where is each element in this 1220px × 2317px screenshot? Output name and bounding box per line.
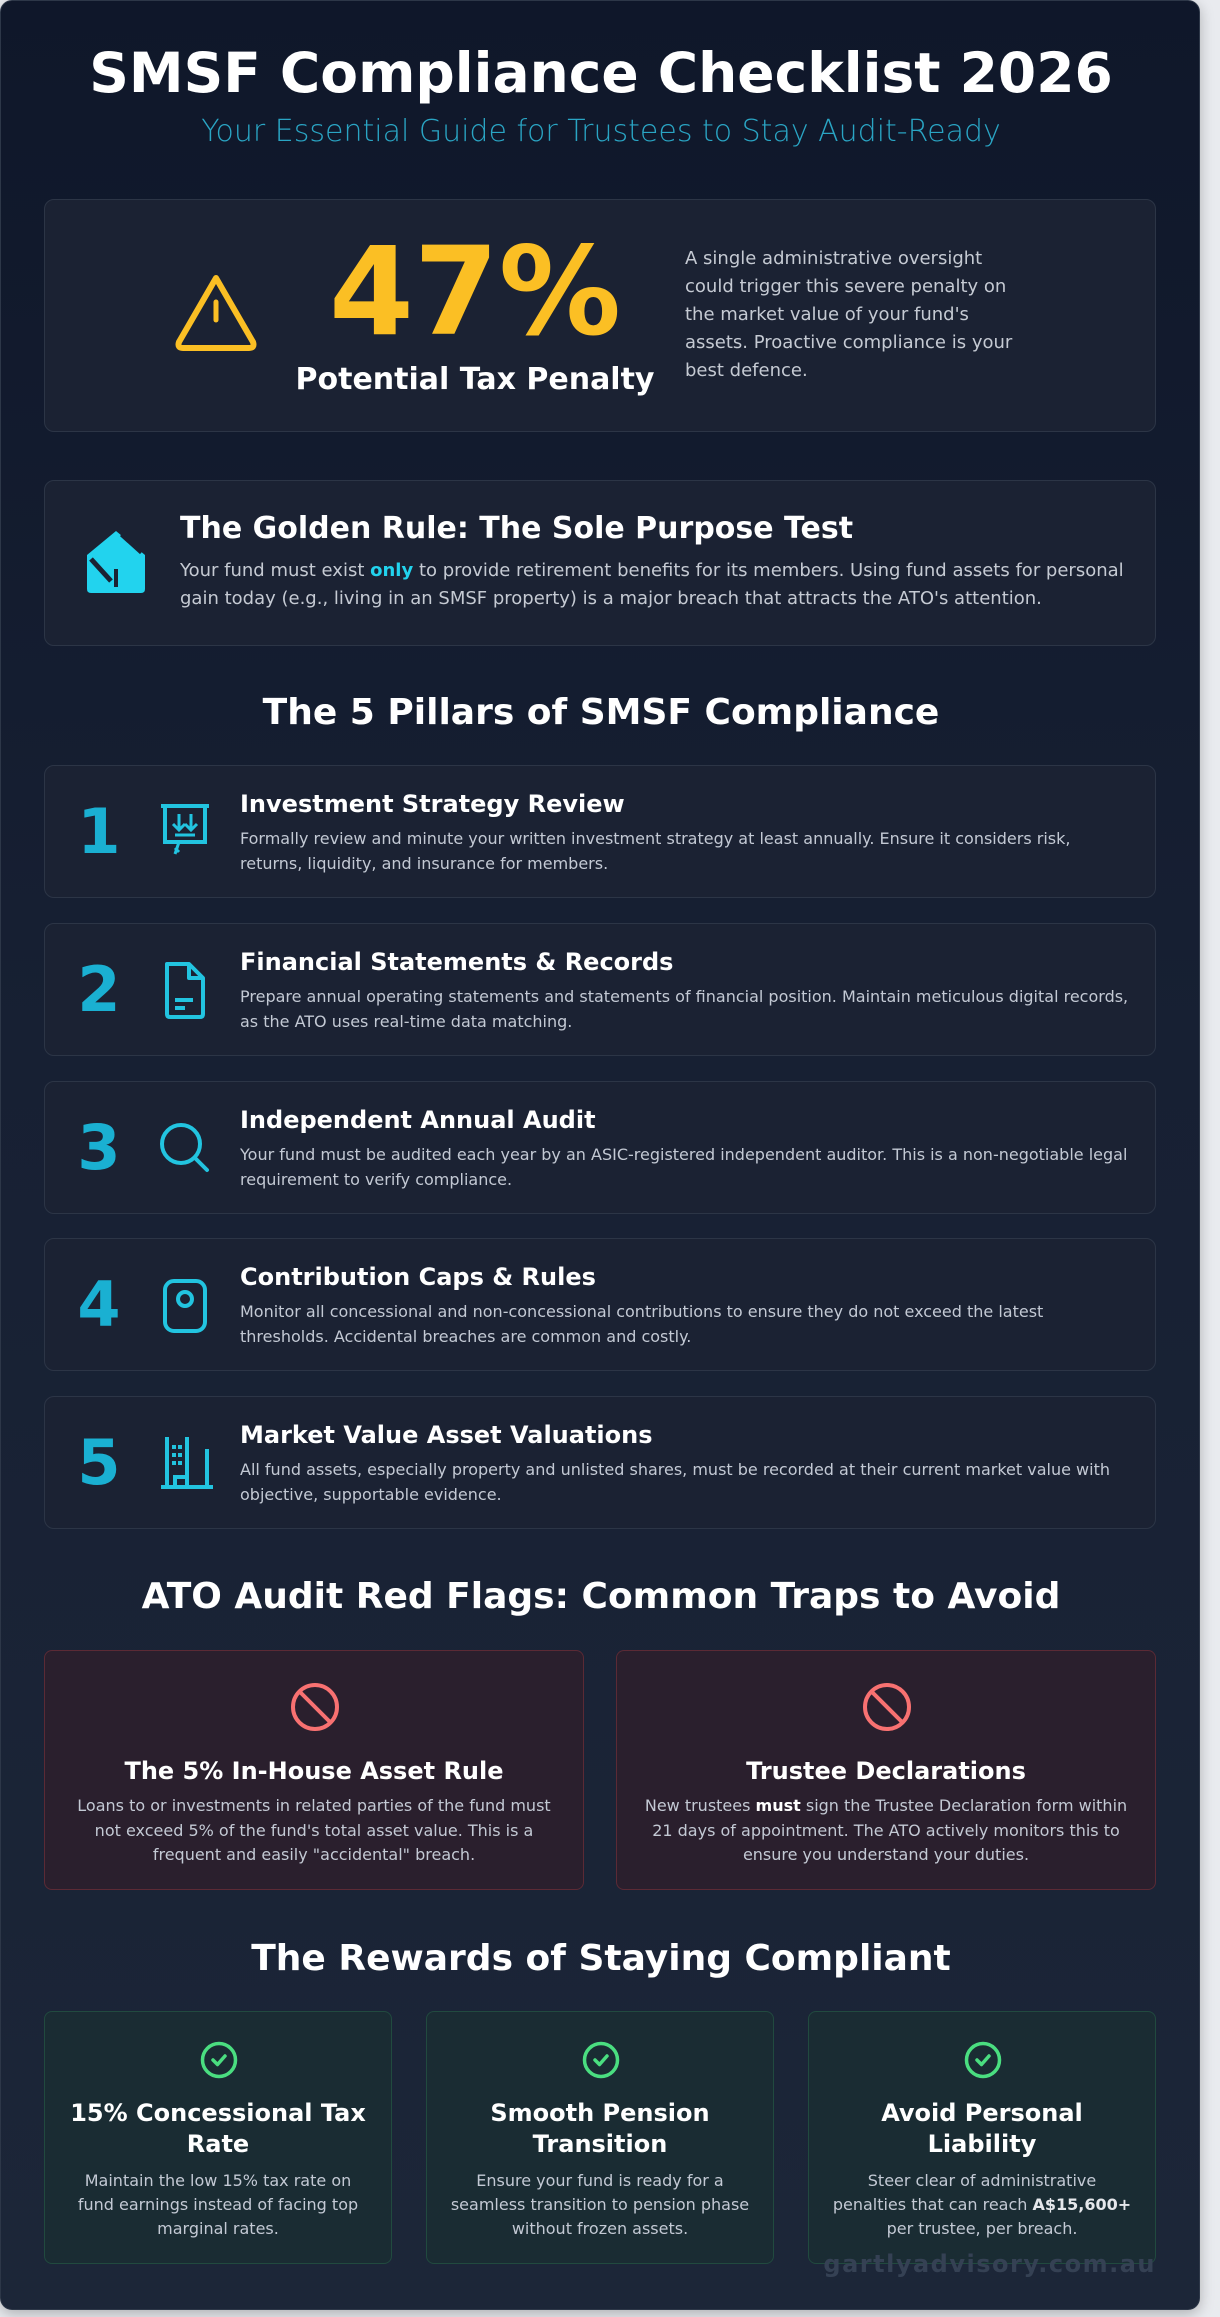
red flag card 2 — [616, 1650, 1156, 1890]
text: Your fund must exist only to provide retirement benefits for its members. Using fund assets for personal gain today (e.g., living in an SMSF property) is a major breach that attracts the ATO's attention. — [180, 560, 1124, 609]
heading: red flags: ATO Audit Red Flags: Common Traps to Avoid — [142, 1576, 1060, 1617]
icon: check — [582, 2042, 620, 2078]
pillar 5: 5 — [77, 1426, 121, 1499]
pillar 4 — [44, 1238, 1156, 1371]
pillar 4: Monitor all concessional and non-concessional contributions to ensure they do not exceed the latest thresholds. Accidental breaches are common and costly. — [240, 1302, 1043, 1346]
heading: rewards: The Rewards of Staying Compliant — [251, 1938, 951, 1979]
subtitle: Your Essential Guide for Trustees to Stay Audit-Ready — [201, 114, 1001, 149]
red flag card 1: The 5% In-House Asset Rule — [124, 1757, 504, 1785]
icon: magnifier — [160, 1123, 210, 1172]
reward card 1: 15% Concessional Tax Rate — [70, 2099, 366, 2158]
reward card 3: Steer clear of administrative — [868, 2171, 1096, 2190]
pillar 2 — [44, 923, 1156, 1056]
pillar 3: Your fund must be audited each year by an ASIC-registered independent auditor. This is a non-negotiable legal requirement to verify compliance. — [240, 1145, 1127, 1189]
reward card 3: penalties that can reach A$15,600+ — [833, 2195, 1131, 2214]
icon: check — [964, 2042, 1002, 2078]
reward card 1: Maintain the low 15% tax rate on fund earnings instead of facing top marginal rates. — [78, 2171, 358, 2238]
penalty text: A single administrative oversight could trigger this severe penalty on the market value of your fund's assets. Proactive compliance is your best defence. — [685, 248, 1012, 381]
icon: prohibited — [863, 1683, 911, 1731]
icon: check — [200, 2042, 238, 2078]
red flag card 2: ensure you understand your duties. — [743, 1845, 1029, 1864]
red flag card 1 — [44, 1650, 584, 1890]
stat label: Potential Tax Penalty — [296, 362, 654, 397]
pillar 1: 1 — [77, 795, 121, 868]
reward card 1 — [44, 2011, 392, 2264]
pillar 1: Formally review and minute your written investment strategy at least annually. Ensure it considers risk, returns, liquidity, and insurance for members. — [240, 829, 1070, 873]
pillar 3 — [44, 1081, 1156, 1214]
watermark: gartlyadvisory.com.au — [823, 2250, 1156, 2278]
icon: building — [161, 1437, 213, 1489]
pillar 2: Prepare annual operating statements and statements of financial position. Maintain meticulous digital records, as the ATO uses real-time data matching. — [240, 987, 1128, 1031]
reward card 2 — [426, 2011, 774, 2264]
reward card 2: Ensure your fund is ready for a seamless transition to pension phase without frozen assets. — [451, 2171, 749, 2238]
red flag card 2: New trustees must sign the Trustee Declaration form within — [645, 1796, 1127, 1815]
red flag card 1: Loans to or investments in related parties of the fund must not exceed 5% of the fund's total asset value. This is a frequent and easily "accidental" breach. — [77, 1796, 551, 1864]
icon: safe — [163, 1279, 207, 1333]
pillar 5 — [44, 1396, 1156, 1529]
pillar 1 — [44, 765, 1156, 898]
icon: house — [87, 531, 145, 593]
reward card 3: per trustee, per breach. — [887, 2219, 1077, 2238]
pillar 3: Independent Annual Audit — [240, 1106, 596, 1134]
red flag card 2: Trustee Declarations — [746, 1757, 1026, 1785]
pillar 2: 2 — [77, 953, 121, 1026]
reward card 2: Smooth Pension Transition — [490, 2099, 710, 2158]
pillar 2: Financial Statements & Records — [240, 948, 673, 976]
pillar 3: 3 — [77, 1111, 121, 1184]
pillar 5: All fund assets, especially property and unlisted shares, must be recorded at their current market value with objective, supportable evidence. — [240, 1460, 1110, 1504]
heading: pillars: The 5 Pillars of SMSF Compliance — [263, 692, 939, 733]
panel: penalty — [44, 199, 1156, 432]
icon: presentation — [161, 804, 209, 854]
red flag card 2: 21 days of appointment. The ATO actively monitors this to — [652, 1820, 1120, 1840]
pillar 1: Investment Strategy Review — [240, 790, 625, 818]
panel: golden rule — [44, 480, 1156, 646]
pillar 4: 4 — [77, 1268, 121, 1341]
title: SMSF Compliance Checklist 2026 — [89, 41, 1113, 105]
icon: document — [165, 962, 205, 1019]
icon: prohibited — [291, 1683, 339, 1731]
pillar 4: Contribution Caps & Rules — [240, 1263, 596, 1291]
heading: The Golden Rule: The Sole Purpose Test — [180, 511, 853, 546]
icon: warning — [176, 275, 256, 351]
reward card 3 — [808, 2011, 1156, 2264]
reward card 3: Avoid Personal Liability — [881, 2099, 1083, 2158]
big stat: 47% — [329, 221, 621, 363]
pillar 5: Market Value Asset Valuations — [240, 1421, 653, 1449]
